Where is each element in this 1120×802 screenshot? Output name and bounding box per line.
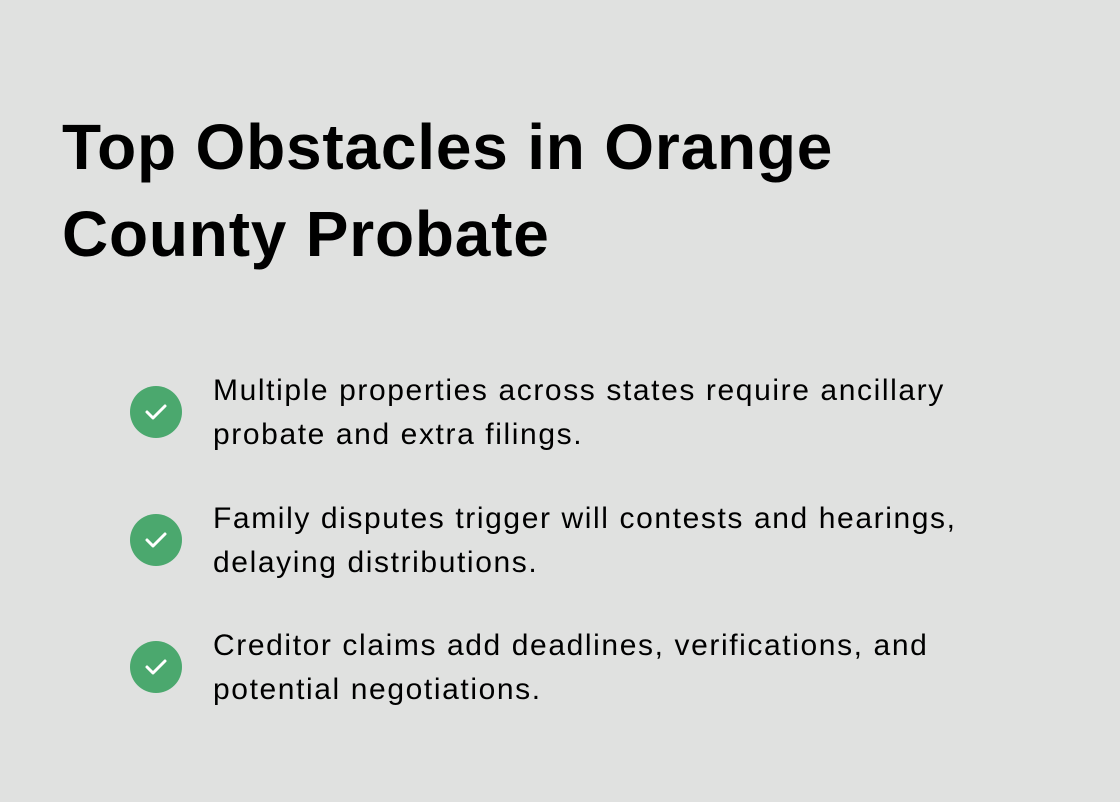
text: Creditor claims add deadlines, verifications, and	[213, 629, 928, 662]
text: Multiple properties across states require ancillary	[213, 374, 945, 407]
item: creditor claims	[130, 629, 928, 706]
title: Top Obstacles in Orange	[62, 111, 833, 183]
icon: check	[130, 386, 182, 438]
item: multiple properties	[130, 374, 945, 451]
icon: check	[130, 641, 182, 693]
text	[213, 502, 957, 579]
title	[62, 111, 833, 270]
text	[213, 374, 945, 451]
text	[213, 629, 928, 706]
text: delaying distributions.	[213, 546, 538, 579]
item: family disputes	[130, 502, 957, 579]
text: probate and extra filings.	[213, 418, 583, 451]
title: County Probate	[62, 198, 550, 270]
icon: check	[130, 514, 182, 566]
text: potential negotiations.	[213, 673, 542, 706]
text: Family disputes trigger will contests and hearings,	[213, 502, 957, 535]
